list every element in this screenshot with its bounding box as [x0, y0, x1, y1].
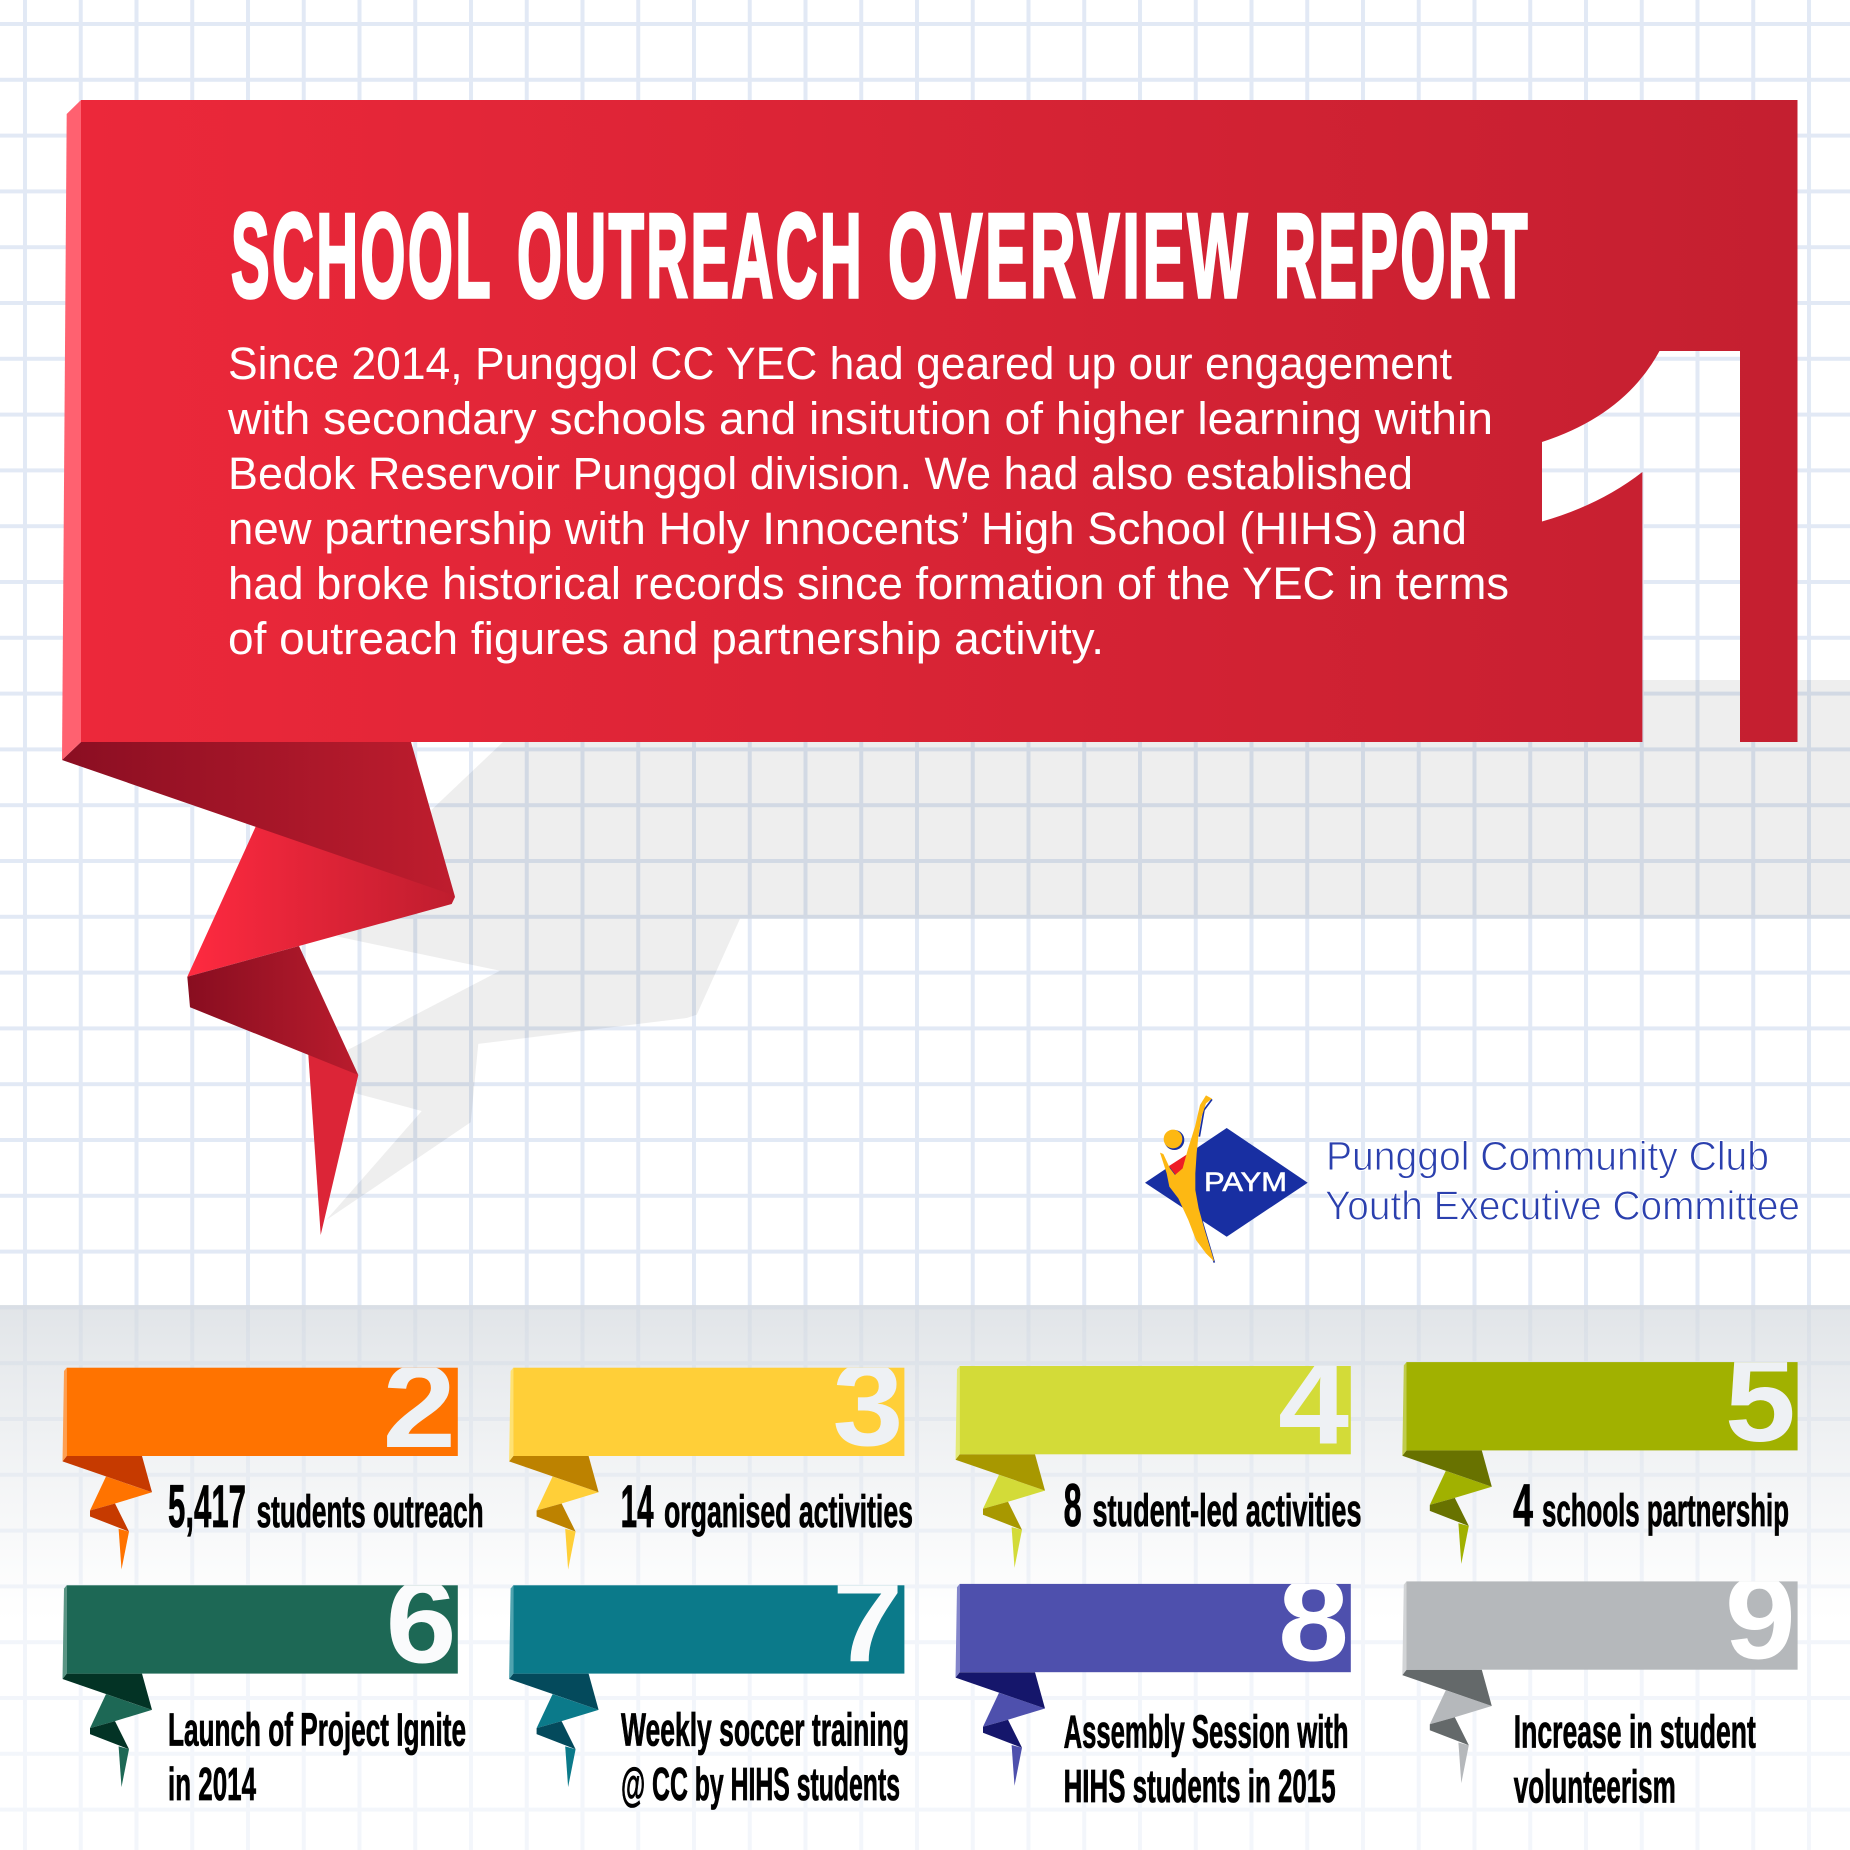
orange mini ribbon: 2 [383, 1341, 456, 1472]
intro paragraph: of outreach figures and partnership activity. [228, 613, 1104, 664]
stat text: student-led activities [1092, 1485, 1362, 1536]
intro paragraph: with secondary schools and insitution of higher learning within [227, 393, 1493, 444]
teal mini ribbon: 7 [832, 1556, 903, 1688]
ribbon left bevel [62, 100, 81, 760]
item text: @ CC by HIHS students [621, 1758, 900, 1810]
item 3: organised activities [509, 1368, 912, 1570]
lower grey gradient band [0, 1305, 1850, 1850]
item text: Assembly Session with [1064, 1705, 1349, 1757]
teal mini ribbon [509, 1585, 904, 1787]
stat text: organised activities [664, 1486, 913, 1537]
main red ribbon [62, 100, 1798, 1235]
title [231, 189, 1530, 323]
logo wordmark: PAYM [1204, 1167, 1287, 1197]
logo dancer figure [1160, 1095, 1214, 1263]
item text: Launch of Project Ignite [168, 1704, 466, 1756]
item 8: assembly session [956, 1584, 1351, 1803]
stat text: 4 [1513, 1472, 1533, 1539]
stat text: students outreach [257, 1486, 484, 1537]
yellow mini ribbon [509, 1368, 904, 1570]
item text: Weekly soccer training [621, 1704, 909, 1756]
grey mini ribbon [1402, 1581, 1798, 1783]
stat text [1064, 1472, 1362, 1539]
olive mini ribbon: 5 [1725, 1335, 1796, 1467]
logo caption: Punggol Community Club [1326, 1133, 1769, 1179]
item text: HIHS students in 2015 [1064, 1760, 1336, 1812]
item text: volunteerism [1514, 1760, 1676, 1812]
indigo mini ribbon [956, 1584, 1351, 1786]
stat text [1513, 1472, 1789, 1539]
intro paragraph: Since 2014, Punggol CC YEC had geared up our engagement [228, 338, 1452, 389]
logo caption: Youth Executive Committee [1325, 1182, 1800, 1228]
stat text: 8 [1064, 1472, 1082, 1539]
grey ribbon shadow [326, 680, 1850, 1220]
stat text: 14 [621, 1473, 654, 1540]
item 9: student volunteerism [1402, 1581, 1798, 1804]
stat text [168, 1473, 484, 1540]
lime mini ribbon: 4 [1278, 1338, 1349, 1469]
item text [1064, 1705, 1349, 1812]
ribbon fold 1 [62, 742, 455, 897]
text: REPORT [1274, 189, 1530, 323]
intro paragraph: Bedok Reservoir Punggol division. We had also established [228, 448, 1413, 499]
green mini ribbon [62, 1585, 458, 1787]
ribbon fold 3 [187, 946, 358, 1075]
orange mini ribbon [62, 1368, 458, 1570]
lime mini ribbon [956, 1366, 1351, 1568]
ribbon tail tip [308, 1050, 358, 1235]
olive mini ribbon [1402, 1362, 1798, 1564]
item 4: student-led activities [956, 1366, 1361, 1568]
intro paragraph [227, 338, 1509, 664]
PAYM logo [1145, 1095, 1308, 1263]
item text [621, 1704, 909, 1810]
item 5: schools partnership [1402, 1362, 1798, 1564]
intro paragraph: new partnership with Holy Innocents’ High School (HIHS) and [228, 503, 1467, 554]
green mini ribbon: 6 [386, 1557, 456, 1689]
item 6: Project Ignite [62, 1585, 466, 1801]
indigo mini ribbon: 8 [1278, 1555, 1349, 1686]
stat text: 5,417 [168, 1473, 246, 1540]
item 2: students outreach [62, 1368, 482, 1570]
title: OUTREACH [517, 189, 864, 323]
logo caption [1325, 1133, 1800, 1228]
grey mini ribbon: 9 [1725, 1553, 1796, 1684]
intro paragraph: had broke historical records since formation of the YEC in terms [228, 558, 1509, 609]
stat text [621, 1473, 913, 1540]
title: OVERVIEW [888, 189, 1250, 323]
item text [1514, 1705, 1756, 1812]
item text [168, 1704, 466, 1810]
logo diamond [1145, 1128, 1308, 1237]
title: SCHOOL [231, 189, 493, 323]
yellow mini ribbon: 3 [833, 1339, 903, 1471]
ribbon fold 2 [187, 818, 455, 977]
banner panel with cut-out number 1 [81, 100, 1798, 742]
item 7: soccer training [509, 1585, 908, 1810]
item text: in 2014 [168, 1758, 256, 1810]
